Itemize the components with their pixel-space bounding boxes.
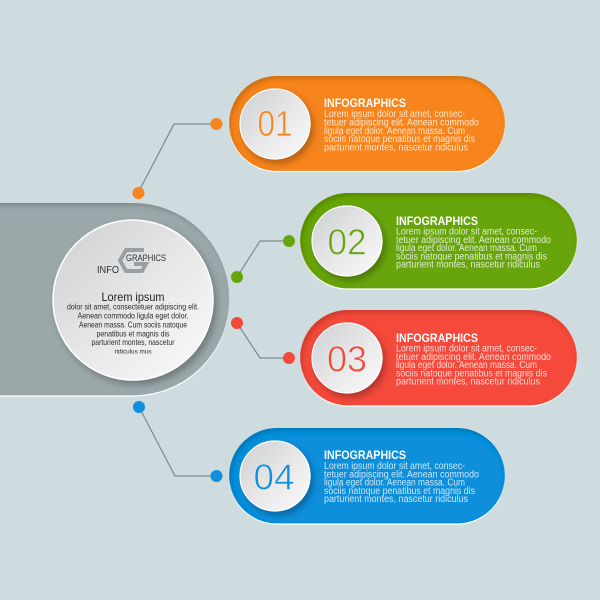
text block: Lorem ipsum dolor sit amet, consec- [324,461,465,472]
panel: 02 green [300,193,577,289]
logo text: GRAPHICS: GRAPHICS [126,253,166,263]
panel: 04 blue [229,428,505,524]
heading: INFOGRAPHICS [396,214,478,228]
text block: Lorem ipsum dolor sit amet, consec- [396,344,537,354]
text block: tetuer adipiscing elit. Aenean commodo [324,118,479,128]
text block: Lorem ipsum dolor sit amet, consec- [324,109,465,120]
central text block: parturient montes, nascetur [92,337,175,347]
central text block: Aenean massa. Cum sociis natoque [79,320,187,330]
text block: sociis natoque penatibus et magnis dis [396,251,547,262]
heading: INFOGRAPHICS [396,331,478,345]
text block: Lorem ipsum dolor sit amet, consec- [396,226,537,238]
text block: sociis natoque penatibus et magnis dis [324,486,475,497]
panel: central grey half-pill [0,203,229,396]
connector: red [231,317,295,364]
central disc [53,220,213,380]
panel: 01 orange [229,76,505,172]
text block: sociis natoque penatibus et magnis dis [396,368,547,379]
text block: ligula eget dolor. Aenean massa. Cum [324,126,465,137]
text block: sociis natoque penatibus et magnis dis [324,134,475,145]
number disc 02: 02 [328,222,366,262]
text block [324,461,479,505]
connector: orange [132,118,222,199]
icon: hexagon logo [120,250,146,271]
logo text: INFO: INFO [97,265,119,276]
central text block: penatibus et magnis dis [96,328,170,338]
number disc 03 [312,323,382,393]
number disc 04: 04 [254,456,294,498]
text block [324,109,479,153]
central text block [67,302,199,356]
text block: parturient montes, nascetur ridiculus [324,494,468,505]
number disc 01 [240,89,310,159]
central text block: dolor sit amet, consectetuer adipiscing elit. [67,302,199,312]
number disc 01: 01 [258,103,292,144]
text block: tetuer adipiscing elit. Aenean commodo [324,469,479,480]
text block: tetuer adipiscing elit. Aenean commodo [396,235,551,246]
text block [396,226,551,271]
number disc 03: 03 [327,338,367,380]
text block: ligula eget dolor. Aenean massa. Cum [396,360,537,371]
text block: tetuer adipiscing elit. Aenean commodo [396,352,551,363]
text block: parturient montes, nascetur ridiculus [396,260,540,271]
heading: INFOGRAPHICS [324,96,406,110]
central text block: Aenean commodo ligula eget dolor. [78,310,188,320]
text block: parturient montes, nascetur ridiculus [396,377,540,388]
panel: 03 red [300,310,577,406]
central heading: Lorem ipsum [102,290,165,304]
text block: ligula eget dolor. Aenean massa. Cum [396,243,537,254]
text block: parturient montes, nascetur ridiculus [324,142,468,153]
central text block: ridiculus mus [114,348,152,356]
connector: green [231,235,295,283]
text block: ligula eget dolor. Aenean massa. Cum [324,478,465,489]
number disc 04 [240,441,310,511]
number disc 02 [312,206,382,276]
connector: blue [133,401,222,482]
text block [396,344,551,388]
heading: INFOGRAPHICS [324,448,406,462]
